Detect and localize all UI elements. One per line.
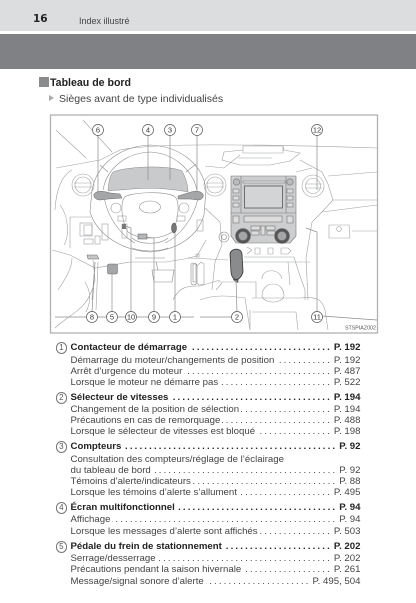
subheading: Sièges avant de type individualisés: [59, 92, 223, 104]
leader lines: [55, 135, 377, 320]
item 1: P. 192: [334, 342, 360, 353]
item 5: Précautions pendant la saison hivernale: [70, 564, 241, 575]
header band: [0, 0, 416, 31]
dashboard diagram: [50, 114, 378, 334]
section heading: Tableau de bord: [50, 77, 131, 89]
item 2: P. 198: [334, 426, 360, 437]
item 3: P. 92: [339, 441, 360, 452]
item 5: Serrage/desserrage: [70, 553, 156, 564]
left paddle: [94, 191, 122, 200]
callout numbers: 8: [90, 313, 94, 322]
knobs: [236, 228, 250, 244]
index list: [56, 342, 360, 587]
side air vents: [72, 174, 324, 197]
item 2: P. 488: [334, 415, 360, 426]
item 3: Compteurs: [70, 441, 121, 452]
small round switch: [219, 232, 229, 242]
right paddle: [178, 191, 203, 200]
item 1: Démarrage du moteur/changements de position: [70, 354, 274, 366]
page number: 16: [33, 13, 48, 25]
item 5: P. 261: [334, 564, 360, 575]
item 1: P. 522: [334, 377, 360, 388]
item 3: Témoins d’alerte/indicateurs: [70, 476, 191, 487]
item 3: P. 92: [339, 465, 360, 476]
item 2: 2: [59, 393, 64, 402]
gear lever: [230, 249, 243, 283]
dark grey band: [0, 34, 416, 68]
item 5: P. 495, 504: [312, 576, 360, 587]
callout numbers: 2: [235, 313, 239, 322]
item 3: du tableau de bord: [70, 465, 151, 476]
hood release: [87, 255, 99, 259]
item 1: Contacteur de démarrage: [70, 342, 187, 353]
parking switch: [122, 224, 126, 229]
item 4: Écran multifonctionnel: [70, 502, 175, 513]
item 2: Sélecteur de vitesses: [70, 392, 168, 403]
side pedal: [191, 263, 197, 285]
item 4: P. 94: [339, 514, 360, 525]
screen: [244, 186, 282, 208]
item 5: Message/signal sonore d’alerte: [70, 576, 204, 587]
cup holders: [262, 271, 284, 302]
item 5: [56, 541, 360, 587]
item 4: P. 94: [339, 502, 360, 513]
item 2: [56, 392, 360, 437]
callout numbers: 6: [96, 126, 100, 135]
item 1: Arrêt d’urgence du moteur: [70, 366, 182, 377]
right glove box handle: [329, 225, 377, 238]
steering wheel: [90, 145, 206, 258]
item 5: P. 202: [334, 553, 360, 564]
parking brake pedal: [108, 264, 118, 274]
item 2: P. 194: [334, 392, 360, 403]
item 2: Lorsque le sélecteur de vitesses est bloqué: [70, 426, 255, 437]
item 5: 5: [59, 542, 64, 551]
item 5: Pédale du frein de stationnement: [70, 541, 222, 552]
item 2: Précautions en cas de remorquage: [70, 415, 220, 426]
callout numbers: 11: [313, 313, 321, 322]
top display pod: [222, 146, 300, 165]
accelerator and brake pedal: [152, 262, 174, 282]
item 2: P. 194: [334, 404, 360, 415]
small switch pads: [138, 234, 147, 239]
callout numbers: 10: [127, 313, 135, 322]
callout numbers: 4: [146, 126, 150, 135]
item 4: Lorsque les messages d’alerte sont affichés: [70, 526, 258, 537]
item 4: [56, 502, 360, 537]
lower console switches: [247, 247, 291, 254]
item 4: Affichage: [70, 514, 110, 525]
callout numbers: 9: [152, 313, 156, 322]
item 1: 1: [59, 343, 64, 352]
item 3: 3: [59, 442, 64, 451]
item 1: [56, 342, 360, 388]
item 2: Changement de la position de sélection: [70, 404, 239, 415]
item 1: Lorsque le moteur ne démarre pas: [70, 377, 218, 388]
item 3: P. 495: [334, 487, 360, 498]
item 1: P. 192: [334, 354, 360, 366]
item 4: 4: [59, 503, 64, 512]
item 3: [56, 441, 360, 498]
callout numbers: 1: [173, 313, 177, 322]
diagram code: STSPIAZ002: [345, 326, 376, 332]
start button: [172, 223, 176, 233]
callouts: [86, 124, 322, 322]
callout numbers: 3: [168, 126, 172, 135]
dashboard contour lines: [52, 120, 377, 330]
callout numbers: 7: [195, 126, 199, 135]
item 3: P. 88: [339, 476, 360, 487]
item 3: Lorsque les témoins d’alerte s’allument: [70, 487, 237, 498]
item 4: P. 503: [334, 526, 360, 537]
instrument cluster: [108, 167, 188, 192]
item 5: P. 202: [334, 541, 360, 552]
callout numbers: [90, 126, 321, 322]
callout numbers: 12: [313, 126, 321, 135]
item 3: Consultation des compteurs/réglage de l’éclairage: [70, 454, 284, 465]
callout numbers: 5: [110, 313, 114, 322]
diagram frame: [50, 115, 378, 333]
center stack: [231, 176, 296, 244]
item 1: P. 487: [334, 366, 360, 377]
running title: Index illustré: [79, 16, 130, 26]
steering wheel switches: [80, 203, 204, 285]
